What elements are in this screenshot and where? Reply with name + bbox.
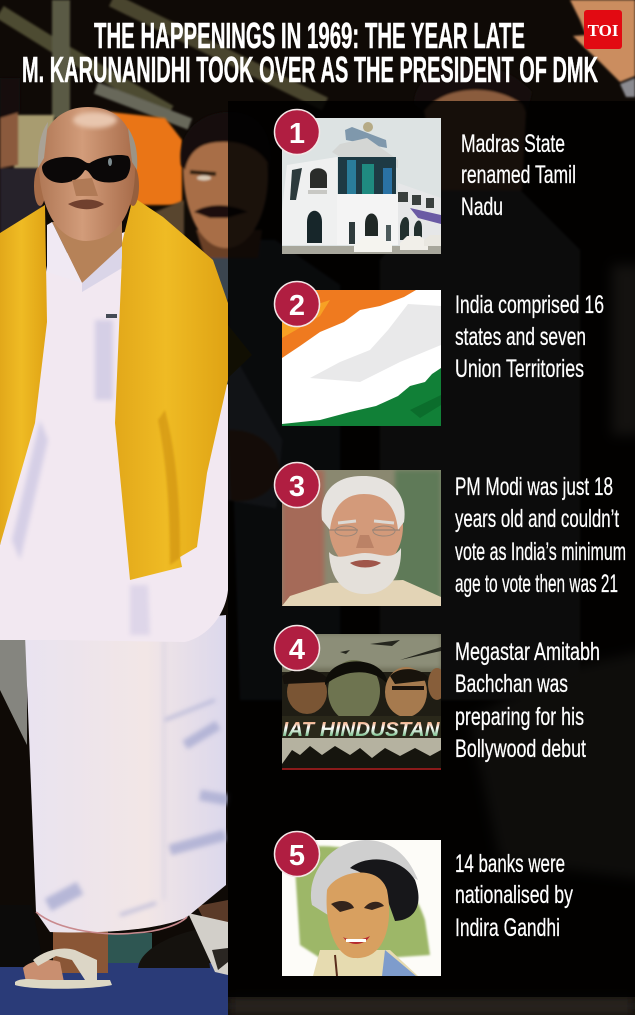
number badge 4: 4 — [289, 634, 305, 666]
feet and shoes — [0, 900, 228, 989]
number badge 1 — [274, 110, 320, 154]
text: item 2: Union Territories — [455, 355, 584, 383]
railing pipes — [0, 0, 325, 124]
light shapes at right — [228, 265, 635, 1015]
dark translucent panel — [228, 101, 635, 997]
item 4: film poster Saat Hindustani: IAT HINDUSTAN — [282, 719, 440, 741]
shirt collar — [47, 222, 122, 292]
text: item 1: Madras State — [461, 130, 565, 158]
person at far left — [0, 78, 42, 234]
number badge 5: 5 — [289, 840, 305, 872]
blue floor — [0, 963, 228, 1015]
text: item 4: Bachchan was — [455, 670, 568, 698]
head — [34, 107, 139, 241]
item 2: tricolour flag image — [282, 290, 441, 426]
dhoti — [0, 615, 228, 934]
text: item 4 — [455, 638, 600, 763]
pale wall — [14, 115, 54, 170]
number badge 2: 2 — [289, 290, 305, 322]
TOI logo: TOI — [588, 21, 619, 40]
neck — [52, 222, 122, 283]
number badge 1: 1 — [289, 118, 305, 150]
man under title — [380, 64, 580, 700]
text: item 4: Bollywood debut — [455, 735, 586, 763]
text: item 4: preparing for his — [455, 703, 584, 731]
shirt — [0, 230, 228, 642]
text: item 1: renamed Tamil — [461, 161, 576, 189]
TOI logo — [584, 10, 622, 49]
orange wall — [110, 112, 182, 205]
text: item 5: nationalised by — [455, 881, 573, 909]
main figure: M. Karunanidhi — [0, 107, 252, 989]
guard behind — [150, 112, 340, 700]
item 1: photo of Madras secretariat building — [282, 118, 441, 254]
number badge 3 — [274, 462, 320, 508]
raised hand top right — [570, 0, 635, 97]
text: item 5: Indira Gandhi — [455, 914, 560, 942]
yellow shawl — [0, 197, 252, 580]
main title — [22, 15, 598, 90]
item 5: watercolour portrait of Indira Gandhi — [282, 840, 441, 976]
text: item 3 — [455, 473, 626, 598]
text: item 2 — [455, 291, 604, 383]
shirt folds — [12, 320, 150, 635]
text: item 1 — [461, 130, 576, 221]
text: item 5: 14 banks were — [455, 850, 565, 878]
number badge 4 — [274, 626, 320, 670]
item 3: portrait photo of PM Modi — [282, 470, 441, 606]
text: item 5 — [455, 850, 573, 942]
number badge 2 — [274, 282, 320, 326]
item 4: film poster Saat Hindustani — [282, 634, 446, 770]
number badge 5 — [274, 832, 320, 876]
number badge 3: 3 — [289, 471, 305, 503]
shirt pocket pen — [106, 314, 117, 318]
text: item 1: Nadu — [461, 193, 503, 221]
